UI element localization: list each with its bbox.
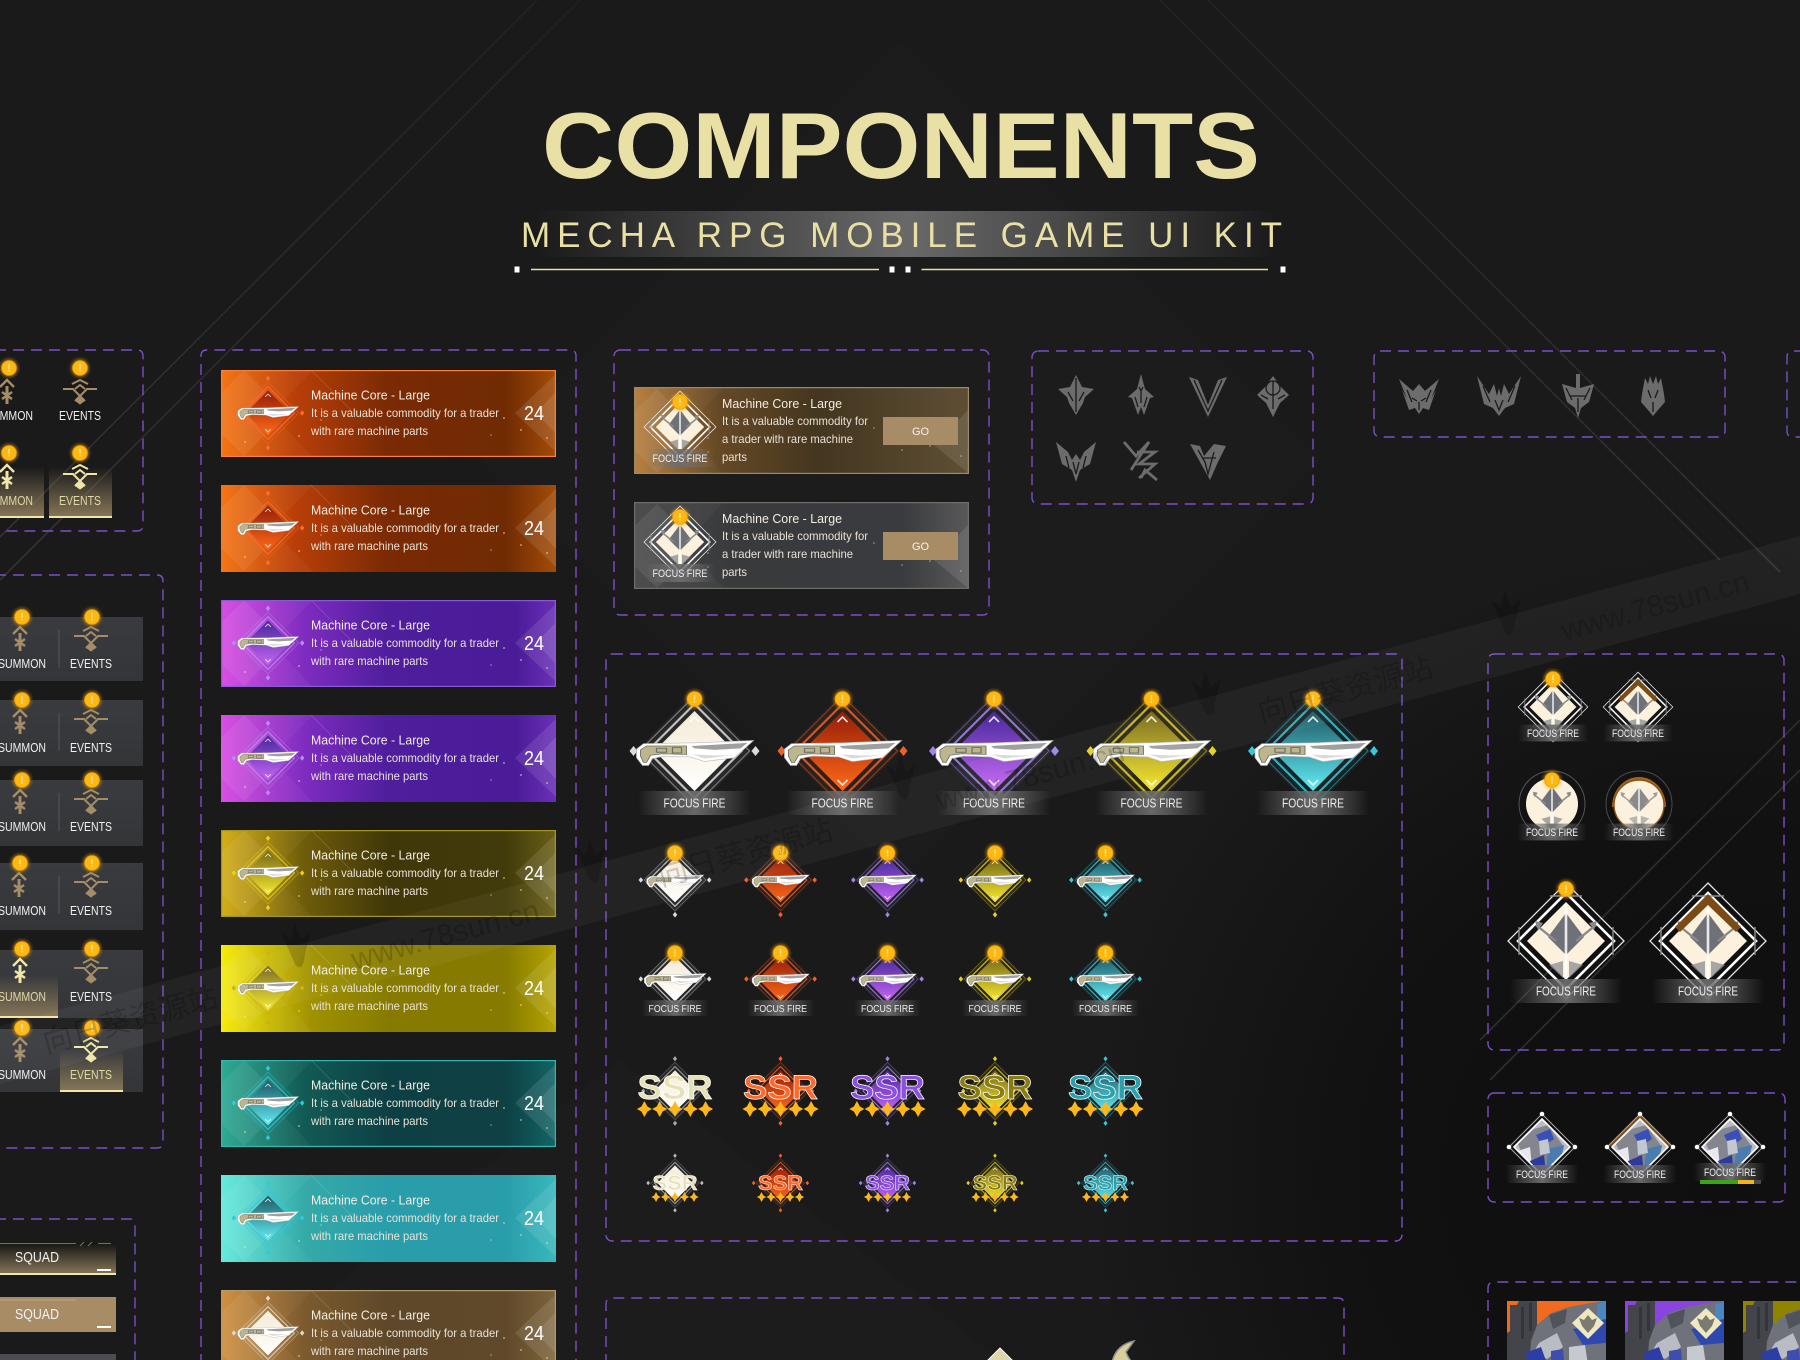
rarity badges SSR small [646,1154,1134,1212]
icon diamond small with alert [1518,670,1588,742]
tab: squad selected: SQUAD [15,1249,59,1266]
card: brown with go button: a trader with rare machine [722,432,853,446]
watermark band: www.78sun.cn [932,735,1128,818]
item bar teal outlined: Machine Core - Large [311,1078,430,1092]
item bar orange: 24 [524,518,544,540]
badges small with label: FOCUS FIRE [754,1003,807,1015]
nav item: summon default [0,359,33,423]
card: brown with go button [614,387,969,474]
watermark band: www.78sun.cn [1557,565,1753,648]
watermark band: 向日葵资源站 [39,981,222,1060]
item bar brown outlined: It is a valuable commodity for a trader [311,1326,499,1340]
card: grey with go button: Machine Core - Large [722,511,842,526]
rarity badges SSR small: SSR [973,1172,1017,1195]
item bar teal bright: It is a valuable commodity for a trader [311,1211,499,1225]
nav item: events default [59,359,101,423]
badge large teal [1248,690,1378,815]
mech head 3 [1562,374,1594,418]
badges small without label [639,844,1142,918]
item bar brown outlined: 24 [524,1323,544,1345]
panel: squad tabs [0,1219,135,1360]
nav bar row 5 summon selected [0,940,143,1018]
item bar yellow outlined [201,830,556,917]
badges small with label: FOCUS FIRE [968,1003,1022,1015]
item bar orange outlined: with rare machine parts [310,424,428,438]
item bar purple [201,715,556,802]
nav bar row 4: EVENTS [70,903,112,918]
item bar yellow bright: with rare machine parts [310,999,428,1013]
title rule [514,266,1286,272]
panel: rarity badges [606,654,1402,1241]
item bar teal bright [201,1175,556,1262]
card: brown with go button: It is a valuable commodity for [722,414,868,428]
nav bar row 1: EVENTS [70,656,112,671]
panel: right clipped panel [1787,351,1800,437]
badge large purple: FOCUS FIRE [963,796,1025,810]
emblem 6 [1124,442,1157,480]
rarity badges SSR large: SSR [743,1069,818,1107]
item bar teal bright: with rare machine parts [310,1229,428,1243]
item bar yellow outlined: It is a valuable commodity for a trader [311,866,499,880]
rarity badges SSR large: SSR [1068,1069,1143,1107]
badge large purple [929,690,1059,815]
item bar purple outlined: It is a valuable commodity for a trader [311,636,499,650]
item bar orange outlined: It is a valuable commodity for a trader [311,406,499,420]
card: grey with go button: GO [912,541,929,553]
mech head 1 [1399,379,1439,414]
emblem 5 [1056,442,1096,482]
nav item: events selected [49,444,112,518]
icon diamond small brown: FOCUS FIRE [1612,728,1664,740]
rarity badges SSR small: SSR [1083,1172,1128,1195]
card: brown with go button: GO [912,426,929,438]
item bar purple: 24 [524,748,544,770]
item bar yellow bright: 24 [524,978,544,1000]
avatar brown selected: FOCUS FIRE [1614,1169,1666,1181]
card: brown with go button: parts [722,450,747,464]
badges small with label: FOCUS FIRE [1079,1003,1132,1015]
watermark band [0,536,1800,1084]
rarity badges SSR large: SSR [850,1069,925,1107]
item bar yellow bright [201,945,556,1032]
panel: top nav tabs [0,350,143,531]
emblem 4 [1257,376,1289,417]
nav bar row 4 [0,854,143,930]
nav item: events selected: EVENTS [59,493,101,508]
item bar yellow bright: It is a valuable commodity for a trader [311,981,499,995]
nav bar row 3: EVENTS [70,819,112,834]
item bar orange outlined [201,370,556,457]
icon circle with alert [1517,771,1587,840]
icon circle brown ring: FOCUS FIRE [1613,827,1665,839]
avatar default [1506,1112,1578,1183]
mech card purple [1625,1301,1724,1360]
item bar orange: Machine Core - Large [311,502,430,518]
item bar yellow outlined: 24 [524,863,544,885]
rarity badges SSR small: SSR [865,1172,910,1195]
badge large red [778,690,908,815]
panel: nav bars [0,575,163,1148]
item bar teal bright: Machine Core - Large [311,1192,430,1208]
nav bar row 5 summon selected: EVENTS [70,989,112,1004]
card: grey with go button: It is a valuable commodity for [722,529,868,543]
item bar purple outlined [201,600,556,687]
mech card orange [1507,1301,1606,1360]
card: grey with go button: FOCUS FIRE [652,568,708,580]
icon: crescent axe top [1112,1341,1134,1360]
mech head 4 [1641,376,1665,416]
badge large red: FOCUS FIRE [812,796,873,810]
card: grey with go button: parts [722,565,747,579]
panel: mech avatars [1488,1093,1785,1202]
item bar orange outlined: Machine Core - Large [311,388,430,402]
rarity badges SSR small: SSR [758,1172,803,1195]
item bar teal bright: 24 [524,1208,544,1230]
avatar with health bar: FOCUS FIRE [1704,1167,1756,1179]
item bar brown outlined: with rare machine parts [310,1344,428,1358]
panel: mech cards [1488,1282,1800,1360]
nav bar row 1 [0,608,143,681]
emblem 3 [1189,377,1227,417]
item bar purple: with rare machine parts [310,769,428,783]
watermark band: 向日葵资源站 [1254,651,1437,730]
item bar brown outlined: Machine Core - Large [311,1308,430,1322]
nav bar row 2: EVENTS [70,740,112,755]
item bar orange [201,485,556,572]
card: brown with go button: FOCUS FIRE [652,453,708,465]
mech head 2 [1477,376,1521,416]
avatar with health bar [1694,1112,1766,1184]
panel: faction emblems [1032,351,1313,504]
icon diamond large with alert [1508,880,1624,1003]
rarity badges SSR large: SSR [957,1069,1033,1107]
icon circle with alert: FOCUS FIRE [1526,827,1578,839]
nav item: events default: EVENTS [59,408,101,423]
panel: focus fire variants [1488,654,1784,1050]
watermark band: 向日葵资源站 [654,814,837,893]
icon diamond small brown [1603,672,1673,742]
item bar orange outlined: 24 [524,403,544,425]
badge large white [630,690,760,815]
rarity badges SSR large: SSR [637,1069,713,1107]
icon diamond small with alert: FOCUS FIRE [1527,728,1579,740]
nav bar row 6 events selected [0,1019,143,1092]
item bar purple: Machine Core - Large [311,732,430,748]
icon circle brown ring [1604,771,1674,840]
tab: squad filled: SQUAD [15,1306,59,1323]
icon: weapon diamond top [986,1348,1014,1360]
panel: bottom weapon icons [606,1298,1344,1360]
item bar orange: with rare machine parts [310,539,428,553]
item bar purple outlined: with rare machine parts [310,654,428,668]
icon diamond large brown: FOCUS FIRE [1678,984,1738,998]
panel: item bars [201,350,576,1360]
nav bar row 2 [0,691,143,766]
item bar orange: It is a valuable commodity for a trader [311,521,499,535]
item bar purple: It is a valuable commodity for a trader [311,751,499,765]
item bar purple outlined: 24 [524,633,544,655]
avatar default: FOCUS FIRE [1516,1169,1568,1181]
badges small with label [639,944,1142,1016]
badge large white: FOCUS FIRE [664,796,725,810]
item bar yellow outlined: with rare machine parts [310,884,428,898]
rarity badges SSR large [637,1056,1144,1126]
badge large yellow [1086,690,1216,815]
title: COMPONENTS [542,93,1260,198]
avatar brown selected [1604,1112,1676,1183]
nav item: summon selected [0,444,44,518]
tab: squad disabled [0,1354,116,1360]
icon diamond large with alert: FOCUS FIRE [1536,984,1596,998]
rarity badges SSR small: SSR [653,1172,697,1195]
card: grey with go button: a trader with rare machine [722,547,853,561]
emblem 2 [1128,374,1154,415]
emblem 1 [1058,375,1094,415]
item bar teal outlined [201,1060,556,1147]
badges small with label: FOCUS FIRE [648,1003,702,1015]
watermark band: www.78sun.cn [347,894,543,977]
card: grey with go button [614,502,969,589]
badges small with label: FOCUS FIRE [861,1003,914,1015]
item bar yellow outlined: Machine Core - Large [311,848,430,862]
nav bar row 3 [0,771,143,846]
item bar teal outlined: It is a valuable commodity for a trader [311,1096,499,1110]
emblem 7 [1190,444,1226,480]
icon diamond large brown [1650,883,1766,1003]
mech card olive [1743,1301,1800,1360]
badge large yellow: FOCUS FIRE [1121,796,1182,810]
badge large teal: FOCUS FIRE [1282,796,1344,810]
subtitle: MECHA RPG MOBILE GAME UI KIT [521,216,1282,255]
tab: squad filled [0,1297,116,1332]
item bar teal outlined: 24 [524,1093,544,1115]
tab: squad selected [0,1242,116,1275]
item bar teal outlined: with rare machine parts [310,1114,428,1128]
nav bar row 6 events selected: EVENTS [70,1067,112,1082]
card: brown with go button: Machine Core - Large [722,396,842,411]
item bar yellow bright: Machine Core - Large [311,962,430,978]
item bar brown outlined [201,1290,556,1360]
item bar purple outlined: Machine Core - Large [311,618,430,632]
panel: notification cards [614,350,989,615]
panel: mech heads [1374,351,1725,437]
